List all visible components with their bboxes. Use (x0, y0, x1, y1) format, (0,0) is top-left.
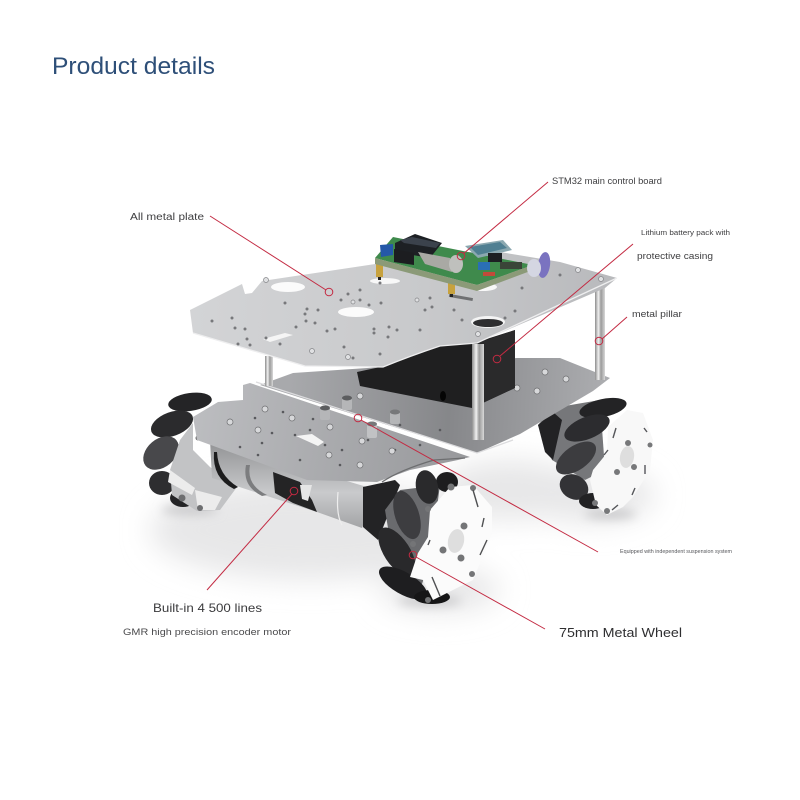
purple wheel (527, 251, 552, 279)
callout: all metal plate (130, 212, 333, 296)
callout: 75mm metal wheel: 75mm Metal Wheel (559, 625, 682, 640)
motor bracket (363, 480, 400, 540)
plate screw slot (449, 294, 473, 301)
callout: lithium battery pack: protective casing (637, 251, 713, 261)
left motor (210, 440, 377, 528)
pcb (375, 237, 533, 285)
callout: encoder motor (123, 487, 298, 638)
callout: all metal plate: All metal plate (130, 212, 205, 223)
robot chassis photo (137, 234, 655, 612)
front lower plate (193, 383, 470, 482)
rear right mecanum wheel (538, 394, 653, 515)
callout: STM32 main control board: STM32 main control board (552, 176, 662, 186)
callout: encoder motor: GMR high precision encoder motor (123, 627, 291, 638)
callout: lithium battery pack: Lithium battery pack with (641, 228, 730, 237)
callout: independent suspension system (354, 414, 732, 555)
board standoffs (376, 263, 455, 297)
battery pack (357, 330, 515, 408)
floor shadow (150, 460, 655, 612)
left mecanum wheel (137, 390, 237, 511)
lower plate standoffs (320, 396, 400, 438)
lower plate slot (296, 434, 324, 446)
callout: metal pillar (595, 309, 682, 345)
callout: lithium battery pack (493, 228, 730, 363)
callout: encoder motor: Built-in 4 500 lines (153, 601, 262, 615)
callout: 75mm metal wheel (409, 551, 682, 640)
top plate (190, 252, 617, 367)
rear lower plate (260, 358, 610, 453)
rear and left pillars (265, 285, 605, 386)
front pillar (472, 344, 484, 440)
callout: STM32 main control board (457, 176, 662, 260)
front lower plate holes and screws (229, 411, 441, 466)
top plate small holes (210, 274, 562, 360)
title: Product details (52, 53, 215, 80)
control board (375, 234, 552, 297)
callout: independent suspension system: Equipped with independent suspension system (620, 549, 732, 555)
front mecanum wheel (371, 468, 492, 606)
top plate large holes (263, 278, 505, 342)
callout: metal pillar: metal pillar (632, 309, 682, 320)
